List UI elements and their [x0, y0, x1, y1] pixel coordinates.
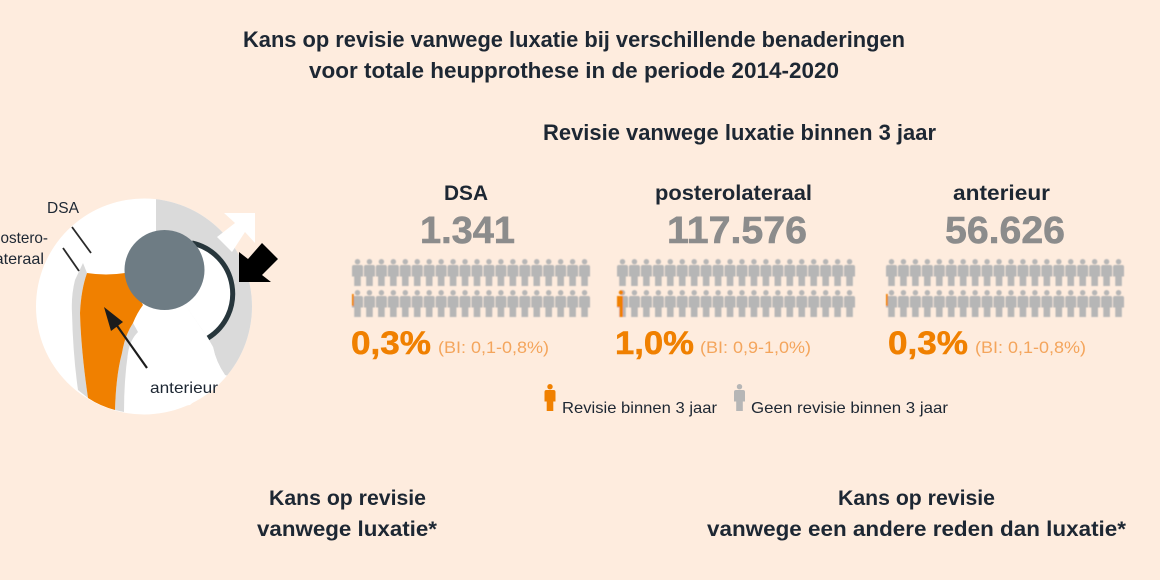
column: DSA — [351, 182, 590, 361]
grey acetabulum — [156, 199, 252, 376]
title: Kans op revisie vanwege luxatie bij verschillende benaderingen — [243, 27, 905, 52]
legend: geen revisie — [734, 384, 949, 417]
joint disc — [36, 198, 252, 414]
subheading: kans op revisie andere reden: Kans op revisie — [838, 487, 995, 510]
column heading: DSA — [444, 182, 488, 205]
white arrow — [217, 213, 255, 252]
patient count: 1.341 — [420, 210, 515, 252]
label: DSA: DSA — [47, 200, 79, 217]
subheading: kans op revisie vanwege luxatie: Kans op revisie — [269, 487, 426, 510]
heading: revisie binnen 3 jaar: Revisie vanwege luxatie binnen 3 jaar — [543, 120, 936, 145]
column heading: posterolateraal — [655, 182, 812, 205]
left grey strip — [72, 263, 88, 398]
legend — [544, 384, 949, 417]
label: anterieur: anterieur — [150, 380, 219, 397]
legend: revisie — [544, 384, 718, 417]
subheading: kans op revisie vanwege luxatie — [257, 487, 438, 541]
person pictogram — [352, 259, 590, 317]
confidence interval: (BI: 0,9-1,0%) — [700, 339, 811, 357]
hip diagram — [0, 190, 278, 414]
column: posterolateraal — [615, 182, 855, 361]
label: postero-lateraal — [0, 230, 48, 268]
subheading: kans op revisie vanwege luxatie: vanwege luxatie* — [257, 518, 438, 541]
dark liner arc — [192, 243, 233, 338]
person pictogram — [617, 259, 855, 317]
title — [243, 27, 905, 83]
right grey strip — [115, 323, 138, 412]
percentage: 0,3% — [888, 325, 968, 361]
column: anterieur — [886, 182, 1124, 361]
white femur area — [128, 305, 225, 412]
black arrow — [239, 243, 278, 282]
confidence interval: (BI: 0,1-0,8%) — [975, 339, 1086, 357]
percentage: 1,0% — [615, 325, 694, 361]
percentage: 0,3% — [351, 325, 431, 361]
legend: geen revisie: Geen revisie binnen 3 jaar — [751, 400, 949, 417]
person pictogram — [886, 259, 1124, 317]
legend: revisie: Revisie binnen 3 jaar — [562, 400, 718, 417]
pointer lines — [63, 227, 91, 271]
femoral head — [124, 230, 204, 310]
column heading: anterieur — [953, 182, 1050, 205]
white socket interior — [165, 242, 232, 338]
subheading: kans op revisie andere reden: vanwege een andere reden dan luxatie* — [707, 518, 1127, 541]
orange femur — [80, 273, 143, 410]
patient count: 56.626 — [945, 210, 1065, 252]
title: voor totale heupprothese in de periode 2014-2020 — [309, 58, 839, 83]
patient count: 117.576 — [667, 210, 807, 252]
confidence interval: (BI: 0,1-0,8%) — [438, 339, 549, 357]
arrow: anterieur — [104, 307, 147, 368]
subheading: kans op revisie andere reden — [707, 487, 1127, 541]
